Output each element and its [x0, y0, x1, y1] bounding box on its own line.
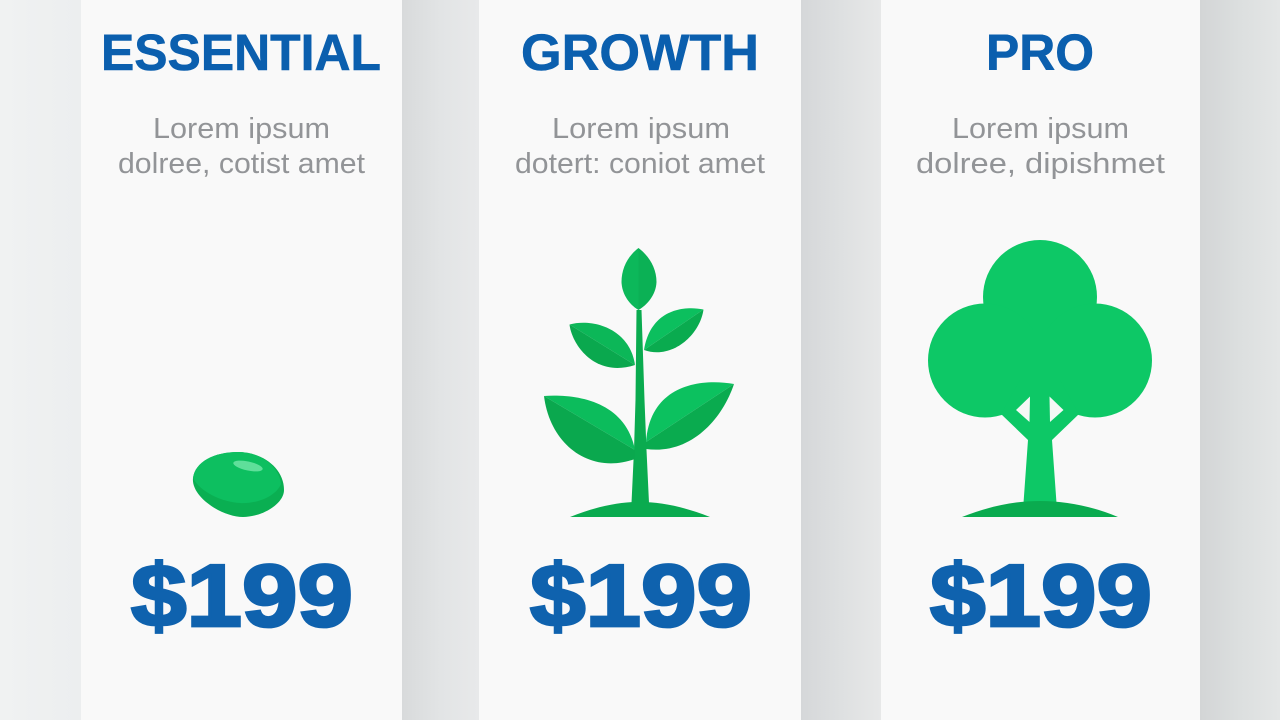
text block: Pro description: Lorem ipsum — [952, 113, 1129, 145]
text block: Pro description: dolree, dipishmet — [916, 148, 1165, 180]
panel: Essential plan — [81, 0, 402, 720]
price: Pro: $199 — [930, 546, 1152, 645]
price: Growth: $199 — [530, 546, 752, 645]
icon: sprout — [544, 248, 734, 517]
text block: Essential description — [118, 113, 365, 180]
icon: seed — [193, 452, 284, 517]
text block: Growth description: dotert: coniot amet — [515, 148, 765, 180]
text block: Growth description — [515, 113, 765, 180]
heading: Essential: ESSENTIAL — [101, 24, 381, 81]
icon: tree — [928, 240, 1152, 517]
heading: Pro: PRO — [986, 24, 1094, 81]
panel: Growth plan — [479, 0, 801, 720]
text block: Essential description: dolree, cotist amet — [118, 148, 365, 180]
text block: Pro description — [916, 113, 1165, 180]
price: Essential: $199 — [131, 546, 353, 645]
heading: Growth: GROWTH — [521, 24, 759, 81]
text block: Essential description: Lorem ipsum — [153, 113, 330, 145]
panel: Pro plan — [881, 0, 1200, 720]
text block: Growth description: Lorem ipsum — [552, 113, 730, 145]
